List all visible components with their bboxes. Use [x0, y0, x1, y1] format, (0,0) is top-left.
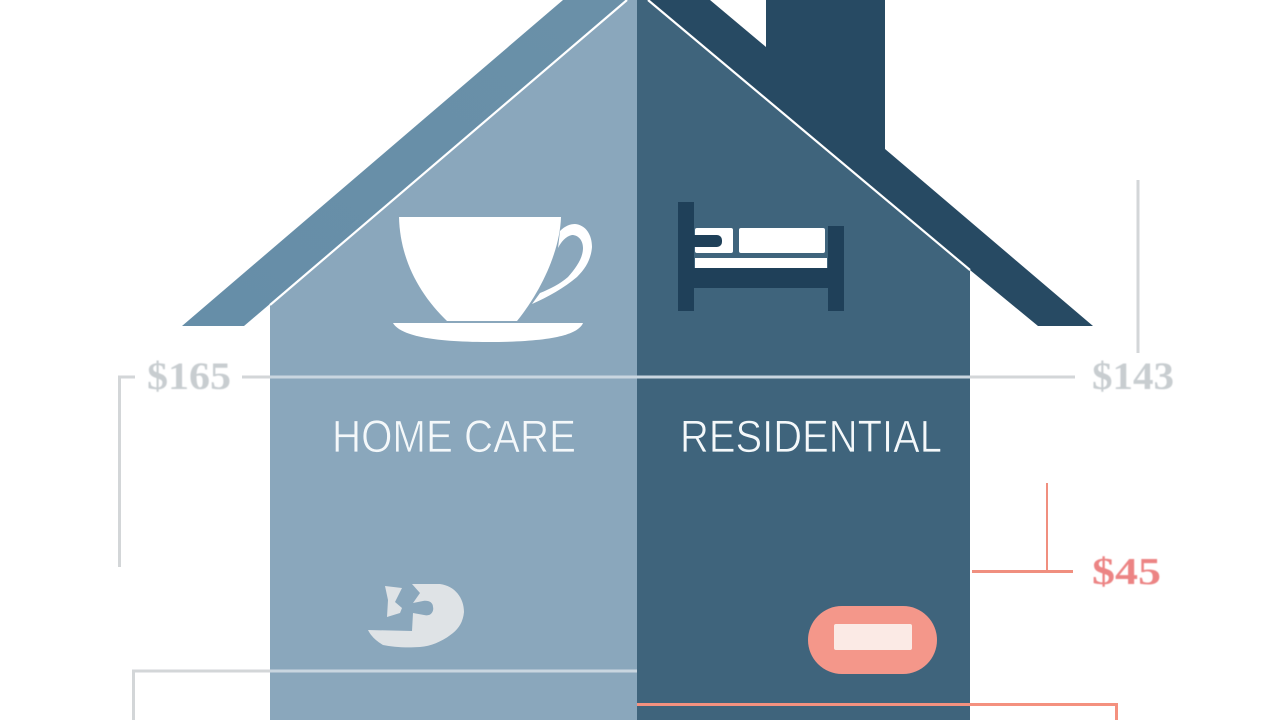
icon: coffee cup — [393, 217, 592, 342]
roof highlight lines — [270, 0, 970, 305]
wall: home care — [270, 0, 637, 720]
value: extra cost: $45 — [1092, 551, 1161, 593]
wall: residential — [637, 0, 970, 720]
icon: puzzle shape — [368, 584, 464, 647]
icon: coral pill badge — [808, 606, 937, 674]
value: home care cost: $165 — [147, 355, 231, 398]
bottom bracket: home care — [270, 670, 637, 672]
roof and chimney: right slope — [648, 0, 1093, 326]
connector line: residential cost — [970, 180, 1138, 377]
label: residential: RESIDENTIAL — [680, 411, 942, 462]
divider line across the house — [270, 376, 970, 378]
connector: coral extra cost — [972, 483, 1073, 572]
connector lines: home care cost — [120, 377, 272, 720]
value: residential cost: $143 — [1092, 355, 1174, 398]
icon: bed — [678, 202, 844, 311]
roof: left slope — [182, 0, 627, 326]
label: home care: HOME CARE — [332, 411, 576, 462]
bottom bracket: residential — [637, 704, 1116, 720]
